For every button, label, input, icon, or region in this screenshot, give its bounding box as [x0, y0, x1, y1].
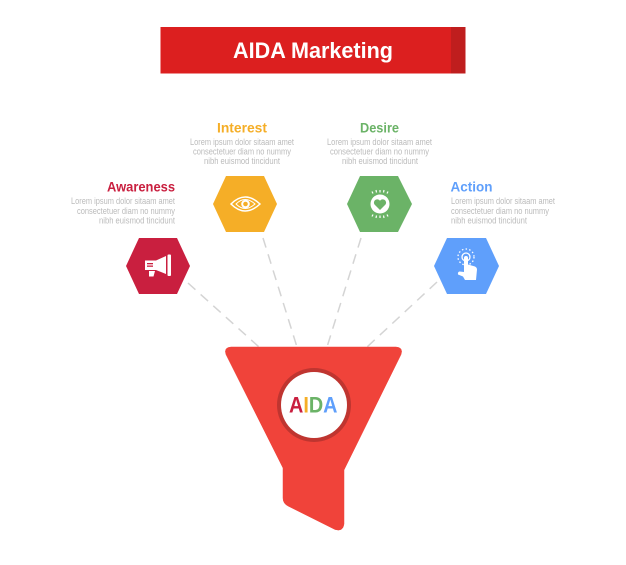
- action description: nibh euismod tincidunt: [451, 216, 527, 226]
- desire description: nibh euismod tincidunt: [342, 156, 418, 166]
- panel: awareness text: [71, 180, 175, 226]
- interest description: Lorem ipsum dolor sitaam amet: [190, 137, 294, 147]
- dashed connector: interest: [263, 238, 297, 347]
- interest description: consectetuer diam no nummy: [193, 146, 291, 156]
- AIDA coloured wordmark: AIDA: [289, 392, 338, 418]
- action description: Lorem ipsum dolor sitaam amet: [451, 196, 555, 206]
- awareness description: Lorem ipsum dolor sitaam amet: [71, 196, 175, 206]
- heading: interest: Interest: [217, 120, 268, 136]
- panel: desire text: [327, 120, 432, 166]
- hexagon: action: [434, 238, 499, 294]
- dashed connector: action: [367, 282, 437, 347]
- heading: action: Action: [450, 180, 492, 194]
- panel: interest text: [190, 120, 294, 166]
- hexagon: desire: [347, 176, 412, 232]
- title text: AIDA Marketing: [233, 38, 393, 63]
- hexagon: interest: [213, 176, 277, 232]
- awareness description: consectetuer diam no nummy: [77, 206, 175, 216]
- icon: eye: [231, 197, 260, 211]
- action description: consectetuer diam no nummy: [451, 206, 549, 216]
- awareness description: nibh euismod tincidunt: [99, 216, 175, 226]
- dashed connector: awareness: [188, 283, 259, 347]
- desire description: Lorem ipsum dolor sitaam amet: [327, 137, 432, 147]
- icon: heart in sunburst: [370, 190, 390, 218]
- icon: tapping hand: [458, 249, 477, 280]
- desire description: consectetuer diam no nummy: [330, 146, 429, 156]
- title banner: [160, 27, 466, 74]
- funnel: [225, 347, 402, 530]
- AIDA badge: [277, 368, 351, 442]
- heading: desire: Desire: [360, 120, 399, 136]
- awareness description: [71, 196, 175, 226]
- dashed connector: desire: [327, 238, 361, 347]
- panel: action text: [450, 180, 555, 226]
- heading: awareness: Awareness: [107, 180, 175, 194]
- desire description: [327, 137, 432, 166]
- interest description: [190, 137, 294, 166]
- interest description: nibh euismod tincidunt: [204, 156, 280, 166]
- action description: [451, 196, 555, 226]
- icon: megaphone: [145, 254, 171, 276]
- hexagon: awareness: [126, 238, 190, 294]
